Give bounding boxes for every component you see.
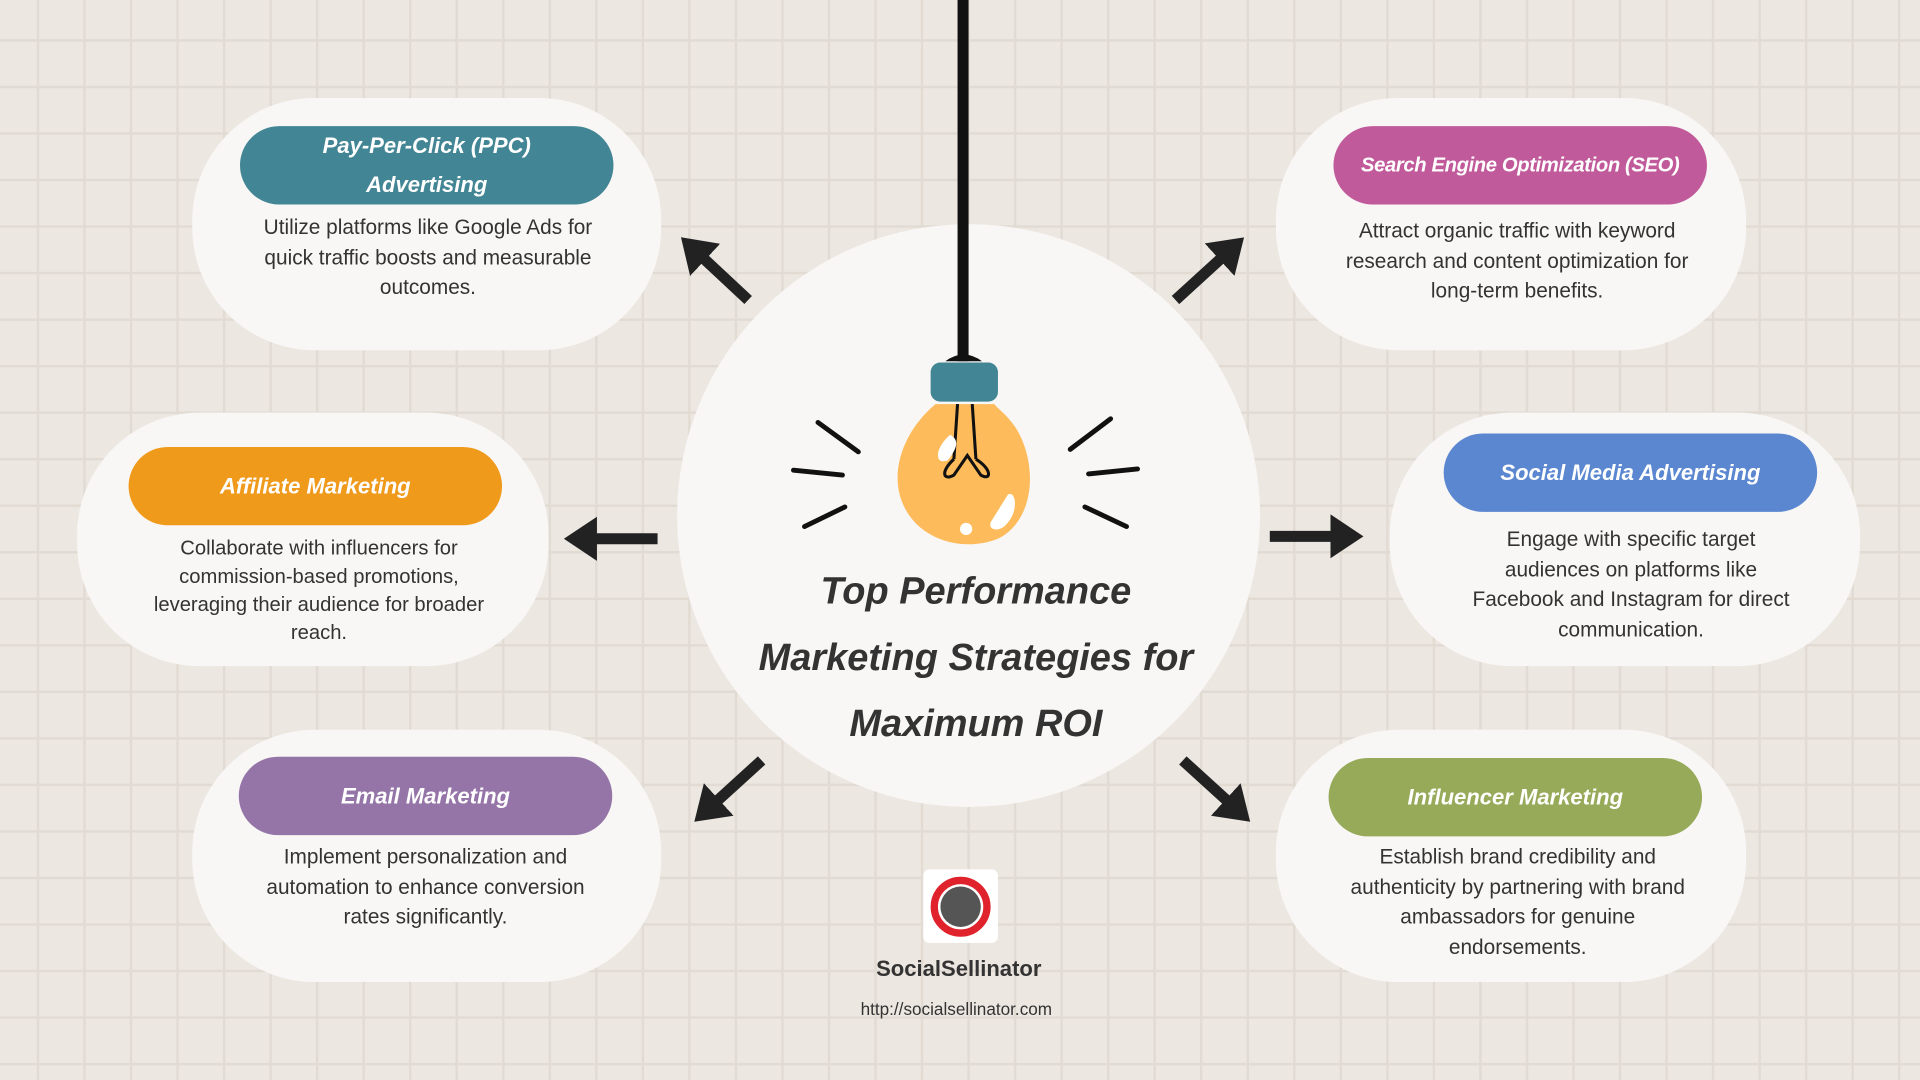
pill: Influencer heading [1329,758,1702,836]
text: Social: Engage with specific target audiences on platforms like Facebook and Instagram for direct communication. [1472,528,1790,641]
url: http://socialsellinator.com [861,999,1052,1019]
pill: Email heading [239,757,612,835]
pill: SEO heading [1333,126,1707,204]
text: Email: Implement personalization and automation to enhance conversion rates significantly. [266,845,585,928]
panel: Influencer [1276,730,1746,982]
pill: Social heading [1444,433,1817,512]
icon: light bulb [791,0,1140,544]
text: SEO: Attract organic traffic with keyword research and content optimization for long-term benefits. [1346,219,1688,302]
pill: Affiliate heading [129,447,502,525]
center circle [677,224,1260,807]
pill: PPC heading: Pay-Per-Click (PPC) [323,133,531,158]
panel: Email [192,730,661,982]
logo [923,869,998,943]
title: Top Performance Marketing Strategies for Maximum ROI [759,569,1193,744]
panel: PPC [192,98,661,350]
pill: Social heading: Social Media Advertising [1500,460,1760,485]
pill: PPC heading: Advertising [366,173,487,197]
pill: SEO heading: Search Engine Optimization (SEO) [1361,154,1679,176]
pill: Affiliate heading: Affiliate Marketing [220,474,411,498]
pill: Influencer heading: Influencer Marketing [1408,785,1623,809]
panel: Affiliate [77,413,549,666]
text: Affiliate: Collaborate with influencers for commission-based promotions, leveraging their audience for broader reach. [154,538,484,644]
text: Influencer: Establish brand credibility and authenticity by partnering with brand ambassadors for genuine endorsements. [1351,845,1685,958]
brand name: SocialSellinator [876,956,1041,981]
text: PPC: Utilize platforms like Google Ads for quick traffic boosts and measurable outcomes. [264,216,592,299]
panel: SEO [1276,98,1746,350]
pill: PPC heading [240,126,613,204]
pill: Email heading: Email Marketing [341,784,510,808]
panel: Social [1390,413,1860,666]
